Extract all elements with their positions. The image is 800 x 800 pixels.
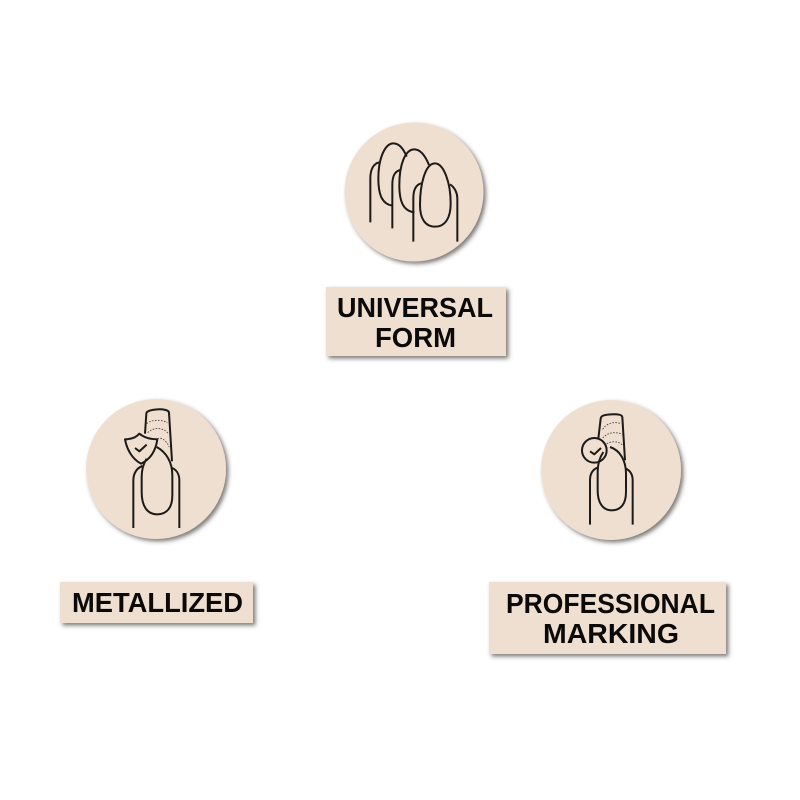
panel: professional marking: [489, 400, 726, 654]
label: universal form: UNIVERSAL: [337, 292, 493, 323]
icon: nail with form and shield: [125, 409, 179, 528]
label: universal form: [326, 287, 506, 356]
icon: professional marking circle badge: [541, 400, 681, 540]
label: professional marking: MARKING: [543, 618, 679, 649]
label: professional marking: PROFESSIONAL: [506, 588, 715, 619]
panel: universal form: [326, 122, 506, 356]
label: universal form: FORM: [375, 322, 456, 353]
icon: nail with form and check mark: [582, 414, 633, 525]
icon: universal form circle badge: [344, 122, 484, 262]
label: metallized: METALLIZED: [72, 587, 243, 618]
label: metallized: [60, 582, 253, 623]
icon: three almond nails on fingers: [370, 143, 457, 242]
label: professional marking: [489, 582, 726, 654]
icon: metallized circle badge: [86, 399, 226, 539]
panel: metallized: [60, 399, 253, 623]
